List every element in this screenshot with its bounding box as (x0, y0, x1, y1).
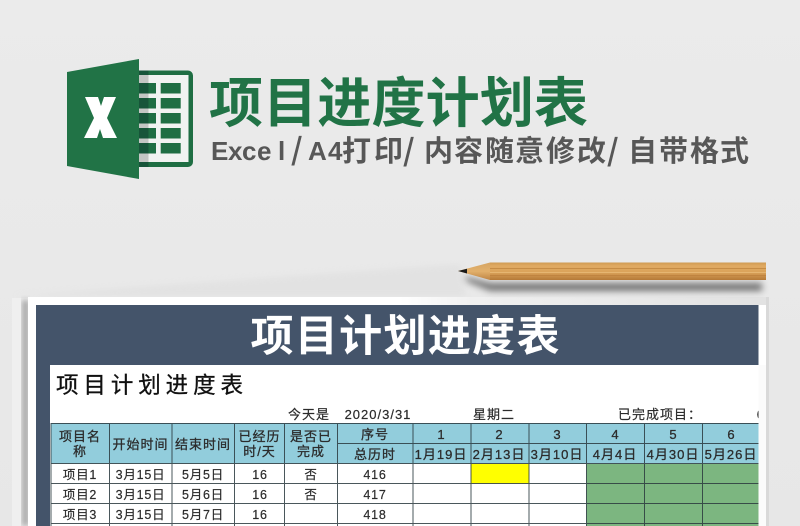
table header cells: 2 (495, 427, 504, 442)
panel: spreadsheet paper (28, 297, 769, 526)
table header cells: 6 (727, 427, 736, 442)
status line (288, 407, 765, 422)
table header cells: 5 (669, 427, 678, 442)
row: 项目1: 416 (363, 468, 387, 482)
table header cells: 4 (611, 427, 620, 442)
row: 项目2: 项目2 (63, 488, 97, 502)
row: 项目3 (63, 508, 387, 522)
table header cells (51, 423, 758, 464)
banner: navy header (36, 305, 758, 526)
table header cells: 4月4日 (593, 447, 637, 462)
status line: 0 (757, 407, 765, 422)
table header cells: 3 (553, 427, 562, 442)
banner title: 项目计划进度表 (250, 313, 560, 361)
status line: 已完成项目： (618, 407, 702, 422)
table header cells: 1 (437, 427, 446, 442)
row: 项目2: 5月6日 (182, 488, 224, 502)
table header cells: 3月10日 (531, 447, 583, 462)
row: 项目1: 16 (252, 468, 268, 482)
gantt bars (471, 464, 758, 526)
subtitle: / (607, 126, 619, 170)
table header cells: 开始时间 (112, 437, 169, 452)
row: 项目1 (63, 468, 387, 482)
table header cells: 完成 (297, 444, 325, 459)
row: 项目2: 16 (252, 488, 268, 502)
table header cells: 4月30日 (647, 447, 699, 462)
row: 项目1: 5月5日 (182, 468, 224, 482)
subtitle: 自带格式 (628, 135, 749, 168)
faint pencil cast shadow (14, 264, 466, 296)
sheet heading: 项目计划进度表 (56, 373, 243, 398)
row: 项目2: 3月15日 (116, 488, 165, 502)
status line: 2020/3/31 (345, 407, 411, 422)
table header cells: 2月13日 (473, 447, 525, 462)
subtitle: 内容随意修改 (424, 135, 606, 168)
row: 项目1: 项目1 (63, 468, 97, 482)
subtitle: / (403, 126, 415, 170)
subtitle: / (291, 125, 303, 169)
table rows (63, 468, 387, 522)
row: 项目2 (63, 488, 387, 502)
table header cells: 已经历 (238, 429, 281, 444)
row: 项目2: 否 (304, 488, 318, 502)
table header cells: 结束时间 (175, 437, 231, 452)
title: 项目进度计划表 (209, 74, 588, 134)
row: 项目3: 5月7日 (182, 508, 224, 522)
row: 项目3: 418 (363, 508, 387, 522)
table header cells: 时/天 (243, 444, 276, 459)
status line: 今天是 (288, 407, 330, 422)
table header cells: 总历时 (354, 447, 396, 462)
table header cells: 称 (73, 444, 87, 459)
subtitle: Excel (211, 136, 285, 166)
table header cells: 是否已 (290, 429, 332, 444)
row: 项目3: 16 (252, 508, 268, 522)
row: 项目3: 项目3 (63, 508, 97, 522)
row: 项目1: 3月15日 (116, 468, 165, 482)
row: 项目1: 否 (304, 468, 318, 482)
table header cells: 序号 (361, 427, 389, 442)
row: 项目2: 417 (363, 488, 387, 502)
icon: pencil (458, 262, 766, 291)
table header cells: 项目名 (59, 429, 101, 444)
row: 项目3: 3月15日 (116, 508, 165, 522)
back sheet shadow (12, 298, 28, 526)
icon: Excel logo (67, 59, 193, 179)
table header cells: 1月19日 (415, 447, 467, 462)
subtitle: A4 (308, 136, 343, 166)
status line: 星期二 (473, 407, 515, 422)
table header cells: 5月26日 (705, 447, 757, 462)
subtitle: 打印 (342, 135, 403, 168)
